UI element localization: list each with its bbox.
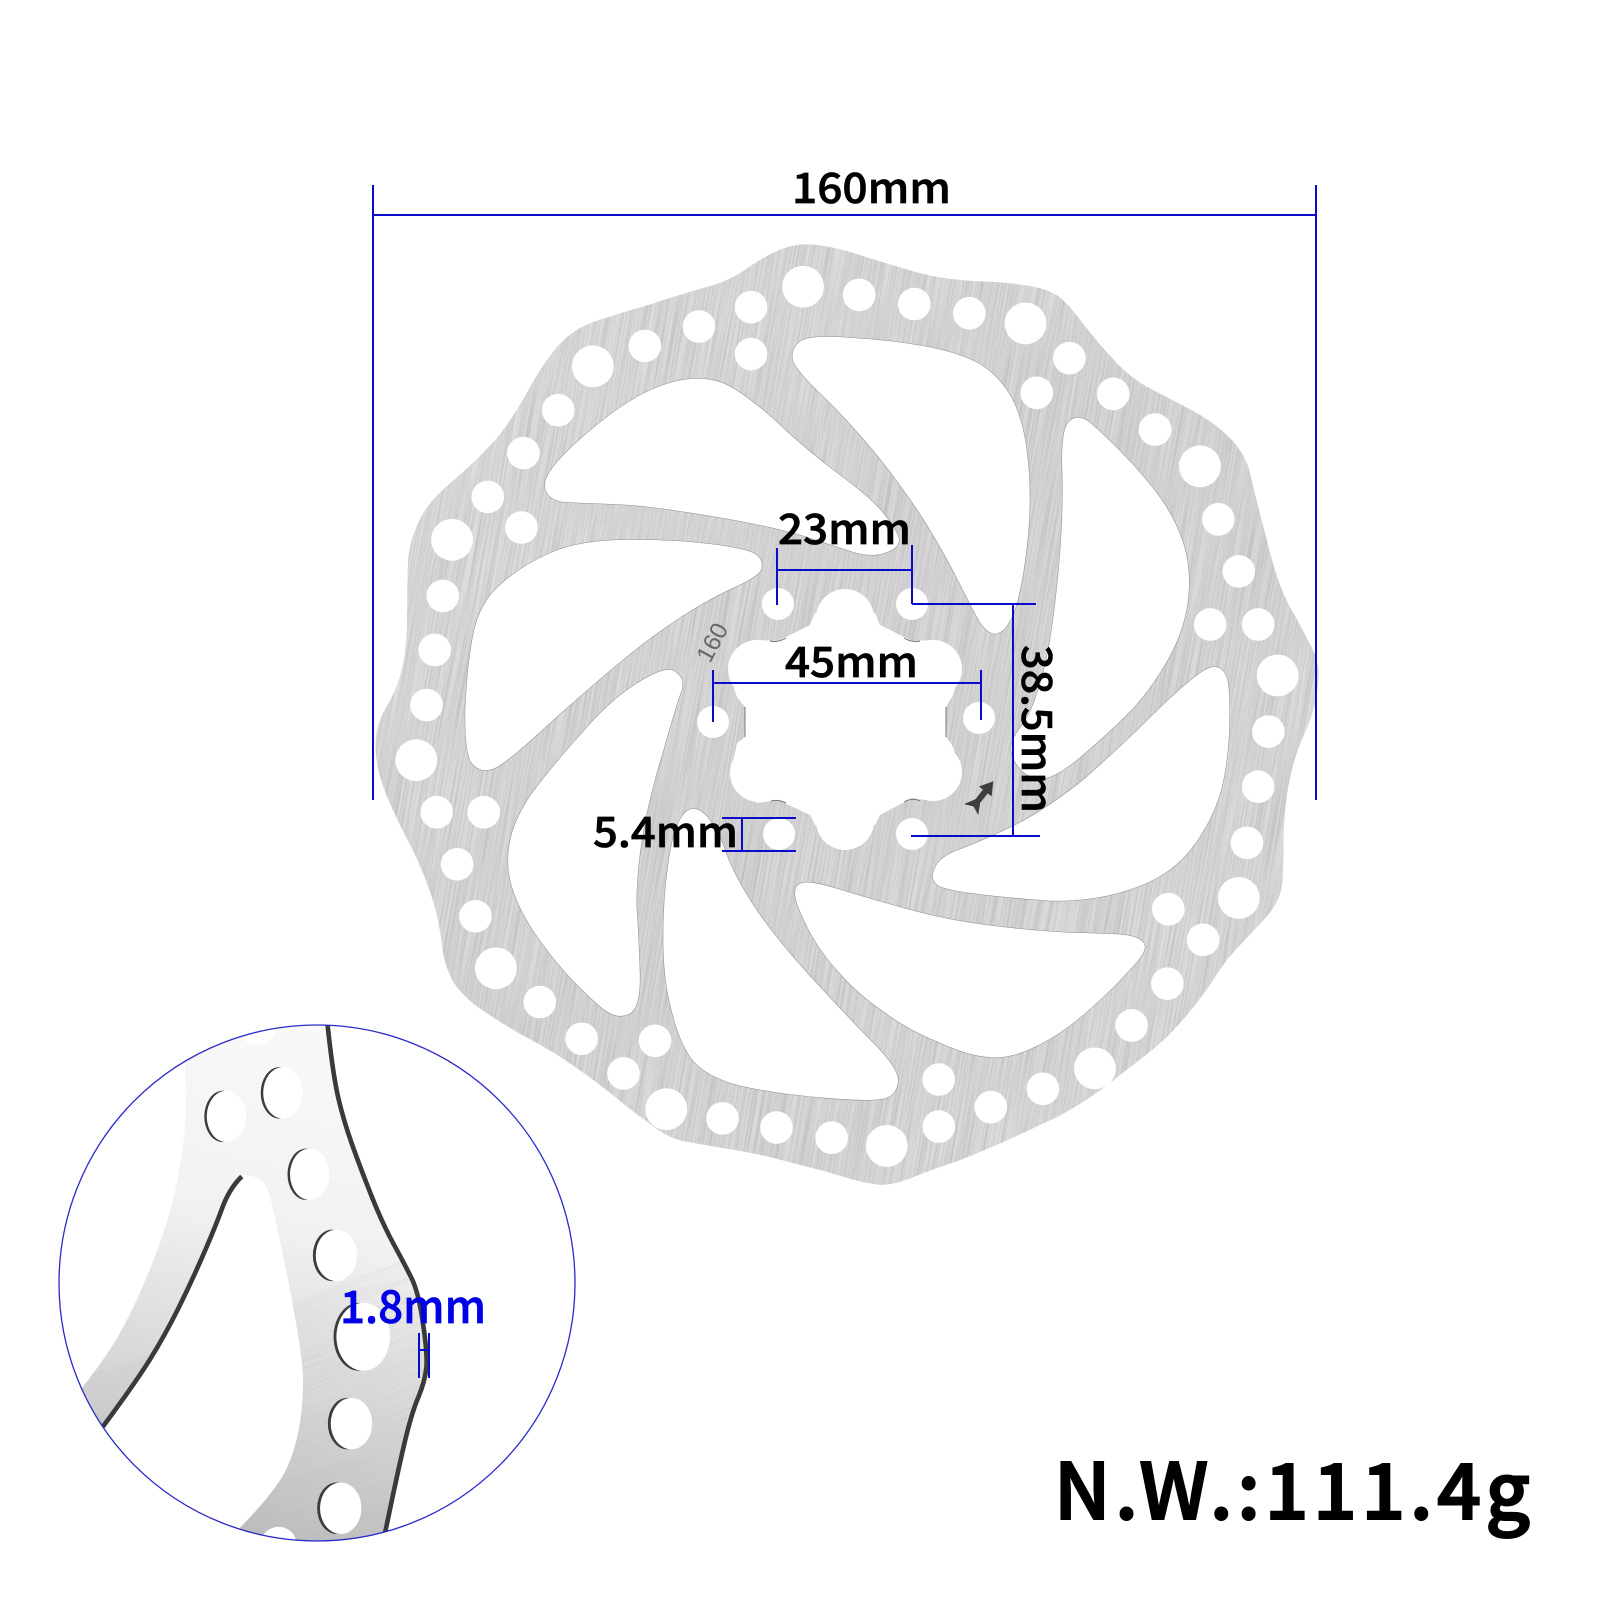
dimension 45mm (713, 629, 981, 722)
vent window edges (469, 341, 1226, 1096)
icon: rotation direction arrow (964, 776, 1000, 815)
net weight label: N.W.:111.4g (1054, 1431, 1530, 1542)
thickness tick marks (419, 1333, 429, 1378)
dimension 45mm: 45mm (785, 629, 918, 690)
bolt holes (697, 588, 995, 850)
vent windows (469, 341, 1226, 1096)
dimension 23mm: 23mm (778, 496, 911, 557)
dimension 23mm (777, 496, 912, 605)
thickness label 1.8mm: 1.8mm (340, 1271, 486, 1336)
brake disc rotor (376, 244, 1318, 1185)
large perimeter holes (395, 266, 1298, 1167)
dimension 38.5mm: 38.5mm (1009, 645, 1070, 813)
small perimeter holes (410, 279, 1285, 1154)
disc body with brushed metal (376, 244, 1318, 1185)
dimension 5.4mm (593, 799, 796, 860)
inset plate dark edges (102, 1024, 427, 1535)
dimension 5.4mm: 5.4mm (593, 799, 738, 860)
inset holes (204, 1067, 390, 1540)
dimension 160mm: 160mm (792, 155, 951, 216)
dimension 160mm (373, 155, 1316, 800)
dimension 38.5mm (911, 604, 1070, 836)
etched size mark 160: 160 (691, 619, 734, 667)
six-lobed centre cutout (728, 589, 962, 850)
inset circle outline (59, 1025, 575, 1541)
inset metal close-up (82, 1026, 428, 1540)
detail inset: disc thickness (58, 1024, 576, 1542)
